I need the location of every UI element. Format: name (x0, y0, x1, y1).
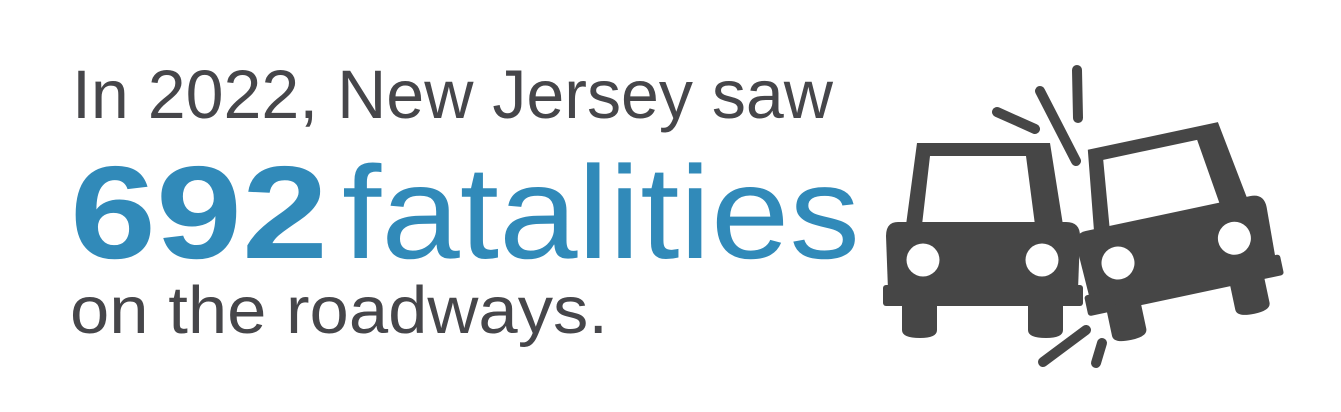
left car (883, 143, 1083, 338)
impact lines (997, 70, 1102, 363)
right car (1055, 115, 1291, 348)
statistic: 692: 692 (70, 139, 328, 286)
headline line 1: In 2022, New Jersey saw (72, 56, 833, 133)
icon: car crash (883, 70, 1291, 363)
statistic label: fatalities: fatalities (342, 139, 860, 286)
headline line 3: on the roadways. (70, 273, 608, 348)
